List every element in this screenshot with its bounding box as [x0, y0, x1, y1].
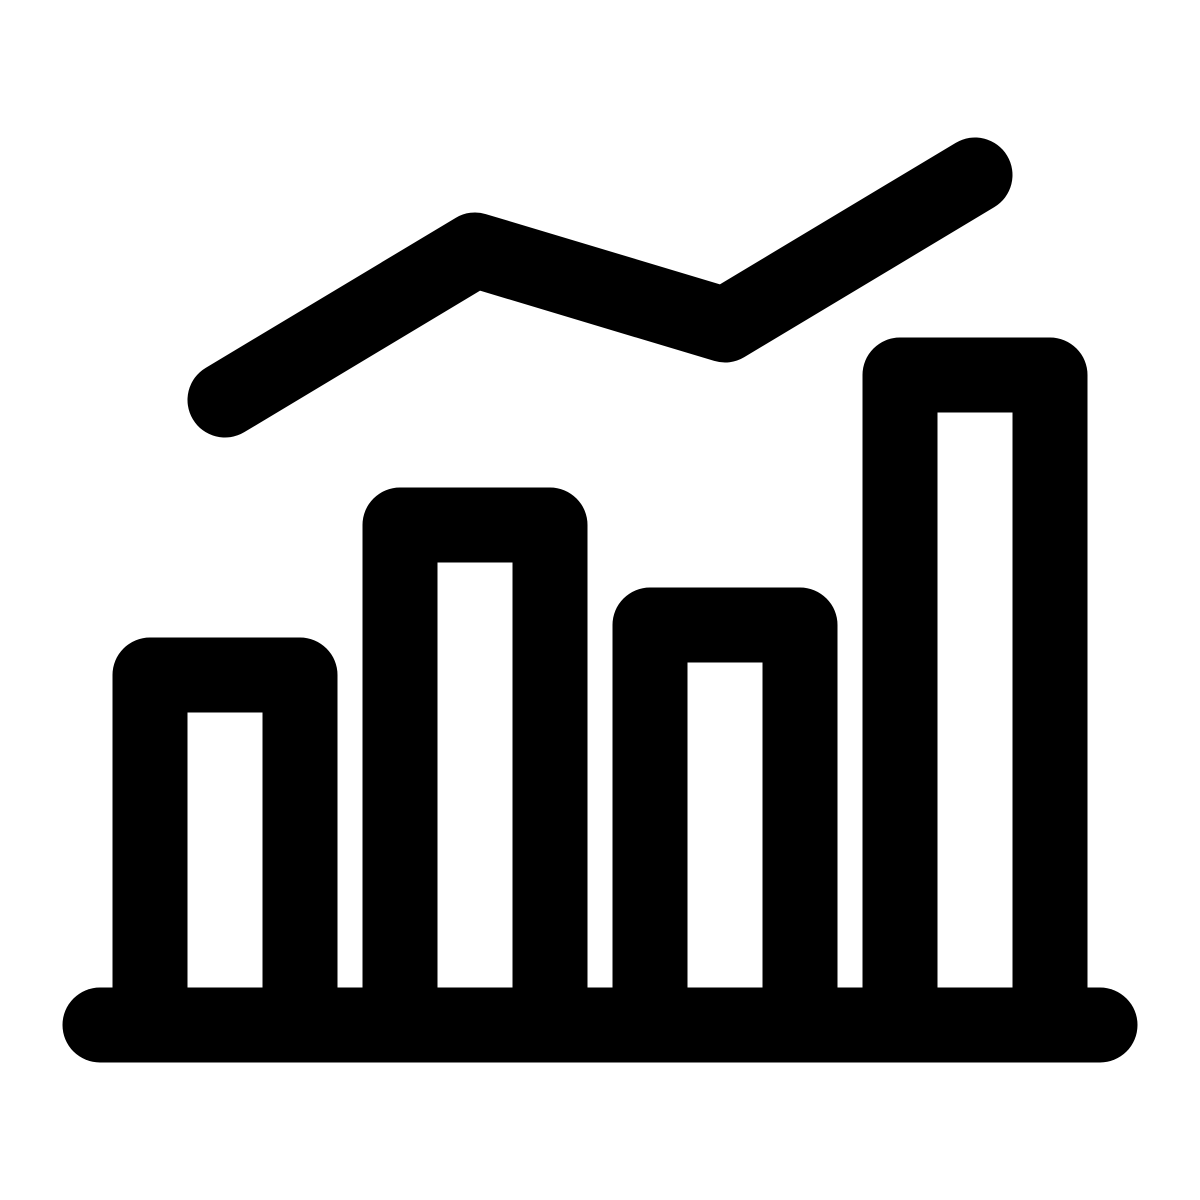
bar 1 — [150, 675, 300, 1025]
baseline — [100, 988, 1100, 1062]
bar 2 — [400, 525, 550, 1025]
bar 4 — [900, 375, 1050, 1025]
trend line — [225, 175, 975, 400]
bar 3 — [650, 625, 800, 1025]
